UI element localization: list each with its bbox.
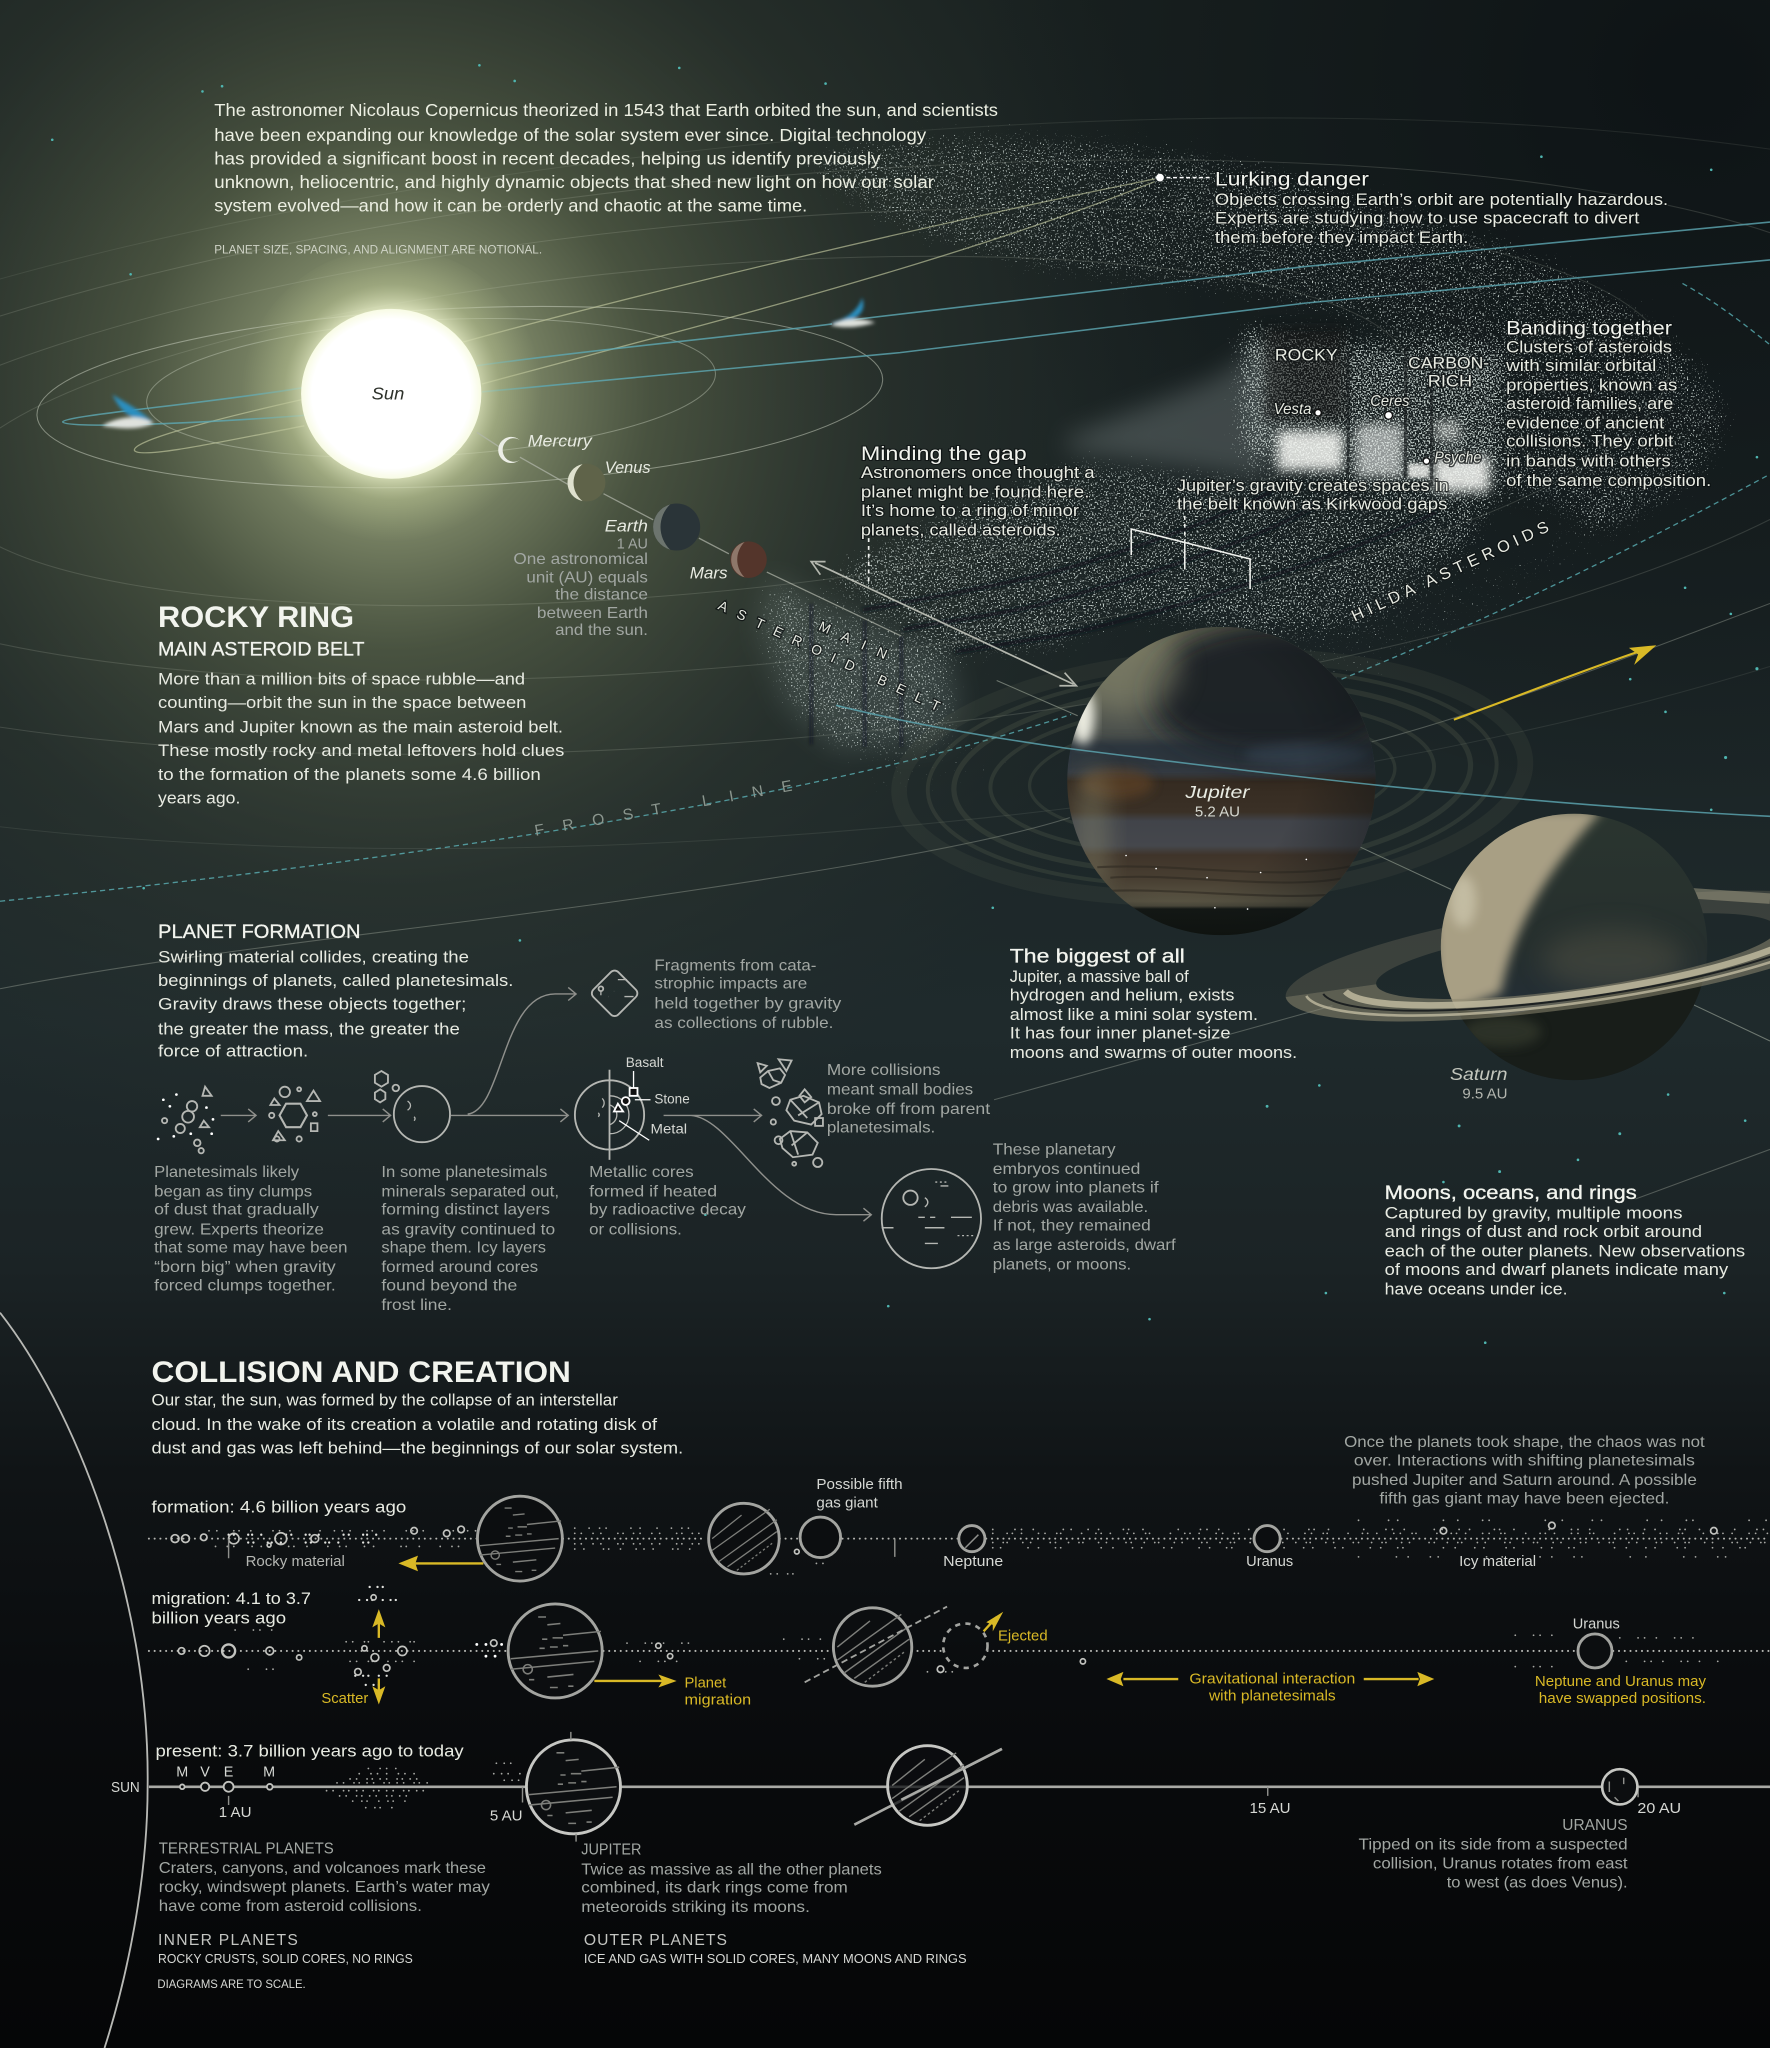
text: metallic cores: formed if heated <box>589 1183 717 1200</box>
label: Jupiter <box>1184 782 1251 820</box>
text: planetary embryos <box>993 1142 1176 1274</box>
callout: Lurking danger: them before they impact Earth. <box>1215 229 1468 247</box>
labels: layers: Basalt <box>626 1055 664 1070</box>
text: planetesimals began: forced clumps together. <box>154 1277 336 1294</box>
text: Uranus: collision, Uranus rotates from east <box>1373 1855 1628 1872</box>
labels: yellow notes: Ejected <box>998 1627 1048 1644</box>
planet labels: inner: Mars <box>690 564 728 583</box>
comet orbits <box>63 179 1770 453</box>
planet axis line <box>477 432 901 636</box>
labels: inner planets: M <box>176 1764 188 1780</box>
labels: asteroid families: ROCKY <box>1275 345 1338 364</box>
planet labels: inner <box>513 432 728 639</box>
text: minerals separated: forming distinct layers <box>381 1202 550 1219</box>
timeline: formation: formation: 4.6 billion years ago <box>152 1497 406 1516</box>
label: frost line: FROST LINE <box>533 778 794 840</box>
text: planetary embryos: These planetary <box>993 1142 1116 1159</box>
text: minerals separated <box>381 1164 559 1314</box>
scatter: material <box>235 1587 1724 1685</box>
text: planetesimals began <box>154 1164 347 1294</box>
planet labels: inner: One astronomical <box>513 551 648 568</box>
text: Uranus: URANUS <box>1562 1817 1628 1834</box>
intro text: have been expanding our knowledge of the solar system ever since. Digital technology <box>214 125 927 145</box>
text: outer planets <box>584 1932 967 1966</box>
panel: Planet formation text: Swirling material collides, creating the <box>158 948 469 967</box>
text: inner planets: DIAGRAMS ARE TO SCALE. <box>157 1978 306 1991</box>
callout: Moons, oceans, and rings: each of the outer planets. New observations <box>1385 1242 1745 1260</box>
labels: inner planets: 1 AU <box>219 1805 251 1821</box>
labels: asteroid families: Psyche <box>1434 449 1482 466</box>
text: Jupiter: meteoroids striking its moons. <box>581 1899 810 1916</box>
labels: yellow notes: Planet <box>684 1675 727 1692</box>
callout: Minding the gap <box>861 443 1096 540</box>
text: planetary embryos: embryos continued <box>993 1161 1140 1178</box>
planet labels: inner: Venus <box>605 458 651 477</box>
callout: Banding together: properties, known as <box>1506 377 1677 395</box>
callout: Lurking danger: Lurking danger <box>1215 168 1370 190</box>
text: terrestrial planets <box>159 1840 490 1915</box>
labels: asteroid families: CARBON- <box>1408 353 1489 372</box>
panel: Collision and creation: COLLISION AND CREATION <box>152 1356 571 1389</box>
panel: Collision and creation: cloud. In the wake of its creation a volatile and rotating disk of <box>152 1415 657 1434</box>
flow lines <box>451 987 576 1122</box>
chart: asteroid cloud <box>758 131 1732 810</box>
callout: The biggest of all: The biggest of all <box>1010 946 1185 968</box>
panel: Collision and creation: Our star, the sun, was formed by the collapse of an interstellar <box>152 1390 618 1409</box>
panel: Rocky ring: ROCKY RING <box>158 601 354 634</box>
asteroid families bright bands <box>1264 327 1489 491</box>
text: more collisions <box>827 1062 991 1136</box>
callout: The biggest of all: almost like a mini solar system. <box>1010 1006 1258 1024</box>
text: minerals separated: shape them. Icy layers <box>381 1240 546 1257</box>
comet right <box>831 298 875 327</box>
intro text: unknown, heliocentric, and highly dynamic objects that shed new light on how our solar <box>214 172 934 192</box>
planet labels: inner: between Earth <box>537 605 648 622</box>
text: more collisions: broke off from parent <box>827 1101 991 1118</box>
planet labels: inner: Mercury <box>528 432 593 451</box>
labels: asteroid families: Ceres <box>1370 393 1410 410</box>
icon: planetary embryo <box>882 1169 981 1268</box>
sun edge arc <box>0 1313 148 2048</box>
diagram: planet formation flow <box>158 968 981 1268</box>
callout: Moons, oceans, and rings: Moons, oceans, and rings <box>1385 1182 1637 1204</box>
stars <box>51 64 1759 1344</box>
text: outer planets: ICE AND GAS WITH SOLID CORES, MANY MOONS AND RINGS <box>584 1951 967 1966</box>
labels: gas giant <box>816 1495 878 1511</box>
callout: Moons, oceans, and rings: and rings of dust and rock orbit around <box>1385 1223 1702 1241</box>
text: planetary embryos: as large asteroids, dwarf <box>993 1237 1176 1254</box>
text: Jupiter: combined, its dark rings come from <box>581 1880 848 1897</box>
text: more collisions: meant small bodies <box>827 1082 973 1099</box>
planet labels: inner: the distance <box>555 587 648 604</box>
text: terrestrial planets: TERRESTRIAL PLANETS <box>159 1840 334 1857</box>
callout: Kirkwood gaps <box>1177 477 1449 513</box>
labels: inner planets: 15 AU <box>1249 1801 1291 1817</box>
panel: Planet formation text <box>158 921 513 1061</box>
text: more collisions: planetesimals. <box>827 1119 935 1136</box>
labels: asteroid families: Vesta <box>1274 401 1312 418</box>
panel: Collision and creation <box>152 1356 683 1458</box>
label: main asteroid belt: ASTEROID BELT <box>716 598 943 714</box>
planet: Jupiter <box>1065 622 1399 935</box>
panel: Collision and creation: dust and gas was left behind—the beginnings of our solar system. <box>152 1439 683 1458</box>
planet: Sun: Sun <box>372 384 404 404</box>
label: Saturn: 9.5 AU <box>1462 1085 1507 1102</box>
arrows: yellow <box>372 1609 1434 1704</box>
text: planetary embryos: If not, they remained <box>993 1217 1151 1234</box>
panel: Rocky ring <box>158 601 564 807</box>
panel: Rocky ring: These mostly rocky and metal leftovers hold clues <box>158 741 564 760</box>
labels: yellow notes: Uranus <box>1573 1617 1620 1633</box>
panel: Rocky ring: to the formation of the planets some 4.6 billion <box>158 765 541 784</box>
callout: The biggest of all: Jupiter, a massive ball of <box>1010 968 1189 986</box>
text: minerals separated: frost line. <box>381 1297 452 1314</box>
planet icons <box>508 1604 1612 1698</box>
callout: Moons, oceans, and rings <box>1385 1182 1745 1298</box>
labels: Icy material <box>1459 1554 1536 1570</box>
callout: Lurking danger: Objects crossing Earth’s orbit are potentially hazardous. <box>1215 191 1668 209</box>
text: fragments: held together by gravity <box>654 995 841 1012</box>
labels: Rocky material <box>246 1553 345 1570</box>
panel: Planet formation text: PLANET FORMATION <box>158 921 361 943</box>
orbit lines <box>0 18 1770 1199</box>
text: fragments: Fragments from cata- <box>654 957 816 974</box>
timeline: migration <box>149 1587 1770 1708</box>
labels: inner planets: M <box>263 1764 275 1780</box>
callout: Minding the gap: planet might be found here. <box>861 484 1089 502</box>
callout: Minding the gap: planets, called asteroids. <box>861 522 1061 540</box>
labels: yellow notes: Scatter <box>321 1690 368 1707</box>
text: planetesimals began: grew. Experts theorize <box>154 1221 324 1238</box>
gap double arrow <box>811 538 1076 686</box>
callout: Kirkwood gaps: the belt known as Kirkwood gaps <box>1177 495 1447 513</box>
text: planetesimals began: Planetesimals likely <box>154 1164 299 1181</box>
text: fragments: as collections of rubble. <box>654 1015 833 1032</box>
labels: inner planets: E <box>224 1764 233 1780</box>
icon: differentiated body <box>575 1070 651 1160</box>
timeline: formation <box>149 1477 1770 1581</box>
labels: asteroid families <box>1274 345 1489 466</box>
text: minerals separated: found beyond the <box>381 1277 517 1294</box>
text: minerals separated: minerals separated out, <box>381 1183 559 1200</box>
text: once the planets <box>1344 1434 1705 1507</box>
dashed frost line orbit <box>0 283 1770 901</box>
panel: Rocky ring: Mars and Jupiter known as the main asteroid belt. <box>158 718 563 737</box>
text: metallic cores: Metallic cores <box>589 1164 694 1181</box>
callout: Minding the gap: Astronomers once thought a <box>861 464 1096 482</box>
planet labels: inner: 1 AU <box>617 537 648 553</box>
callout: Moons, oceans, and rings: Captured by gravity, multiple moons <box>1385 1205 1682 1223</box>
callout: The biggest of all <box>1010 946 1297 1062</box>
labels: yellow notes: migration <box>684 1691 751 1708</box>
Saturn ring front <box>1286 915 1770 1021</box>
icon: accreting clump <box>269 1087 320 1142</box>
flow lines <box>664 1109 871 1221</box>
Saturn ring back <box>1286 891 1770 997</box>
labels: yellow notes: Gravitational interaction <box>1189 1671 1355 1688</box>
text: inner planets: INNER PLANETS <box>158 1932 298 1949</box>
labels: Neptune <box>943 1554 1003 1570</box>
callout: Minding the gap: It’s home to a ring of minor <box>861 502 1080 520</box>
labels: inner planets: SUN <box>111 1780 140 1796</box>
labels: Uranus <box>1246 1554 1293 1570</box>
labels: yellow notes <box>321 1617 1706 1708</box>
arrow <box>221 1109 256 1122</box>
label: main asteroid belt: MAIN <box>817 619 889 662</box>
callout: Moons, oceans, and rings: of moons and dwarf planets indicate many <box>1385 1261 1729 1279</box>
intro text <box>214 100 998 216</box>
text: Jupiter <box>581 1842 882 1916</box>
text: once the planets: fifth gas giant may have been ejected. <box>1379 1490 1669 1507</box>
text: once the planets: Once the planets took shape, the chaos was not <box>1344 1434 1705 1451</box>
teal orbit across Jupiter <box>836 705 1770 816</box>
planet: Sun <box>242 248 542 541</box>
text: inner planets <box>157 1932 413 1991</box>
callout: The biggest of all: moons and swarms of outer moons. <box>1010 1044 1297 1062</box>
labels: inner planets: V <box>200 1764 210 1780</box>
labels: layers <box>626 1055 690 1137</box>
arrow: inward migration <box>398 1556 483 1571</box>
text: once the planets: over. Interactions with shifting planetesimals <box>1354 1452 1695 1469</box>
panel: Planet formation text: beginnings of planets, called planetesimals. <box>158 971 513 990</box>
text: outer planets: OUTER PLANETS <box>584 1932 727 1949</box>
timeline: present: present: 3.7 billion years ago to today <box>155 1742 464 1761</box>
callout: Banding together: collisions. They orbit <box>1506 433 1674 451</box>
planet: Saturn <box>1430 810 1711 1084</box>
callout: Banding together: evidence of ancient <box>1506 414 1665 432</box>
panel: Planet formation text: force of attraction. <box>158 1042 308 1061</box>
callout: Kirkwood gaps: Jupiter’s gravity creates spaces in <box>1177 477 1449 495</box>
text: metallic cores <box>589 1164 746 1238</box>
callout: Minding the gap: Minding the gap <box>861 443 1027 465</box>
timeline: migration: migration: 4.1 to 3.7 <box>152 1589 311 1608</box>
icon: planetesimal <box>375 1071 450 1142</box>
planet icons <box>477 1496 1280 1581</box>
intro text: The astronomer Nicolaus Copernicus theorized in 1543 that Earth orbited the sun, and scientists <box>214 100 998 120</box>
label: Saturn: Saturn <box>1450 1064 1507 1084</box>
scatter: rocky and icy material <box>209 1520 1770 1574</box>
intro text: system evolved—and how it can be orderly and chaotic at the same time. <box>214 196 807 216</box>
text: terrestrial planets: Craters, canyons, and volcanoes mark these <box>159 1860 486 1877</box>
text: metallic cores: or collisions. <box>589 1221 682 1238</box>
callout: Lurking danger: Experts are studying how to use spacecraft to divert <box>1215 209 1640 227</box>
planet icons <box>526 1732 1637 1842</box>
panel: Planet formation text: Gravity draws these objects together; <box>158 995 466 1014</box>
label: Hilda asteroids: HILDA ASTEROIDS <box>1349 518 1552 625</box>
text: Uranus: to west (as does Venus). <box>1447 1874 1628 1891</box>
note: notional: PLANET SIZE, SPACING, AND ALIGNMENT ARE NOTIONAL. <box>214 243 542 256</box>
text: planetary embryos: debris was available. <box>993 1199 1148 1216</box>
planet labels: inner: unit (AU) equals <box>526 570 648 587</box>
text: Uranus <box>1359 1817 1628 1891</box>
labels: inner planets: 20 AU <box>1637 1801 1681 1817</box>
callout: Banding together: in bands with others <box>1506 452 1671 470</box>
planet: Earth <box>653 504 700 551</box>
label: Jupiter: Jupiter <box>1184 782 1251 802</box>
marker: hazardous object <box>1156 174 1210 182</box>
icon: rubble pile <box>590 968 640 1018</box>
text: minerals separated: as gravity continued to <box>381 1221 555 1238</box>
arrow <box>328 1109 391 1122</box>
labels <box>246 1477 1536 1570</box>
timeline: migration: billion years ago <box>152 1609 286 1628</box>
labels: inner planets <box>111 1764 1681 1825</box>
planet: Mars <box>730 541 767 578</box>
comet left <box>102 394 154 428</box>
labels: Possible fifth <box>816 1477 903 1493</box>
text: Jupiter: JUPITER <box>581 1842 641 1859</box>
text: Uranus: Tipped on its side from a suspected <box>1359 1836 1628 1853</box>
labels: layers: Stone <box>654 1092 690 1107</box>
Kirkwood gaps and block faces <box>811 491 1437 747</box>
text: planetesimals began: that some may have been <box>154 1240 347 1257</box>
text: metallic cores: by radioactive decay <box>589 1202 746 1219</box>
yellow arrow <box>1454 645 1656 720</box>
asteroid belt cloud <box>327 1763 525 1808</box>
text: fragments: strophic impacts are <box>654 976 807 993</box>
callout: The biggest of all: It has four inner planet-size <box>1010 1024 1231 1042</box>
labels: asteroid families: RICH <box>1428 372 1472 391</box>
callout: Moons, oceans, and rings: have oceans under ice. <box>1385 1280 1568 1298</box>
icon: dust clump <box>158 1087 213 1153</box>
label: Saturn <box>1450 1064 1507 1102</box>
text: fragments <box>654 957 841 1032</box>
intro text: has provided a significant boost in recent decades, helping us identify previously <box>214 149 881 169</box>
labels: yellow notes: Neptune and Uranus may <box>1535 1673 1706 1690</box>
labels: inner planets: 5 AU <box>490 1809 523 1825</box>
timeline: present <box>111 1732 1770 1842</box>
bracket: Kirkwood gaps <box>1131 516 1250 589</box>
planet: Venus <box>567 464 605 502</box>
text: inner planets: ROCKY CRUSTS, SOLID CORES, NO RINGS <box>158 1951 413 1966</box>
panel: Rocky ring: counting—orbit the sun in the space between <box>158 693 526 712</box>
text: terrestrial planets: have come from asteroid collisions. <box>159 1898 422 1915</box>
text: terrestrial planets: rocky, windswept planets. Earth’s water may <box>159 1879 490 1896</box>
Jupiter rings <box>893 641 1532 914</box>
inner planet markers <box>180 1782 273 1792</box>
text: planetary embryos: planets, or moons. <box>993 1257 1131 1274</box>
text: once the planets: pushed Jupiter and Saturn around. A possible <box>1352 1472 1697 1489</box>
callout: Lurking danger <box>1215 168 1668 247</box>
planet: Mercury <box>498 437 520 463</box>
text: more collisions: More collisions <box>827 1062 941 1079</box>
callout: The biggest of all: hydrogen and helium, exists <box>1010 986 1234 1004</box>
panel: Planet formation text: the greater the mass, the greater the <box>158 1019 460 1038</box>
label: Jupiter: 5.2 AU <box>1195 803 1240 820</box>
callout: Banding together <box>1505 317 1711 490</box>
callout: Banding together: asteroid families, are <box>1506 395 1673 413</box>
text: planetesimals began: “born big” when gravity <box>154 1259 336 1276</box>
callout: Banding together: Banding together <box>1506 317 1673 339</box>
text: minerals separated: formed around cores <box>381 1259 538 1276</box>
icon: fragment rocks <box>758 1059 823 1167</box>
planet labels: inner: and the sun. <box>555 622 648 639</box>
text: planetesimals began: of dust that gradually <box>154 1202 319 1219</box>
labels: yellow notes: with planetesimals <box>1208 1688 1336 1705</box>
planet labels: inner: Earth <box>605 517 648 536</box>
labels: layers: Metal <box>651 1122 687 1137</box>
labels: yellow notes: have swapped positions. <box>1539 1690 1706 1707</box>
text: minerals separated: In some planetesimals <box>381 1164 547 1181</box>
panel: Rocky ring: MAIN ASTEROID BELT <box>158 639 364 661</box>
panel: Rocky ring: More than a million bits of space rubble—and <box>158 669 525 688</box>
callout: Banding together: with similar orbital <box>1505 357 1656 375</box>
callout: Banding together: Clusters of asteroids <box>1506 339 1672 357</box>
text: planetary embryos: to grow into planets if <box>993 1179 1159 1196</box>
text: planetesimals began: began as tiny clumps <box>154 1183 312 1200</box>
panel: Rocky ring: years ago. <box>158 788 240 807</box>
callout: Banding together: of the same composition. <box>1506 472 1711 490</box>
text: Jupiter: Twice as massive as all the other planets <box>581 1861 882 1878</box>
